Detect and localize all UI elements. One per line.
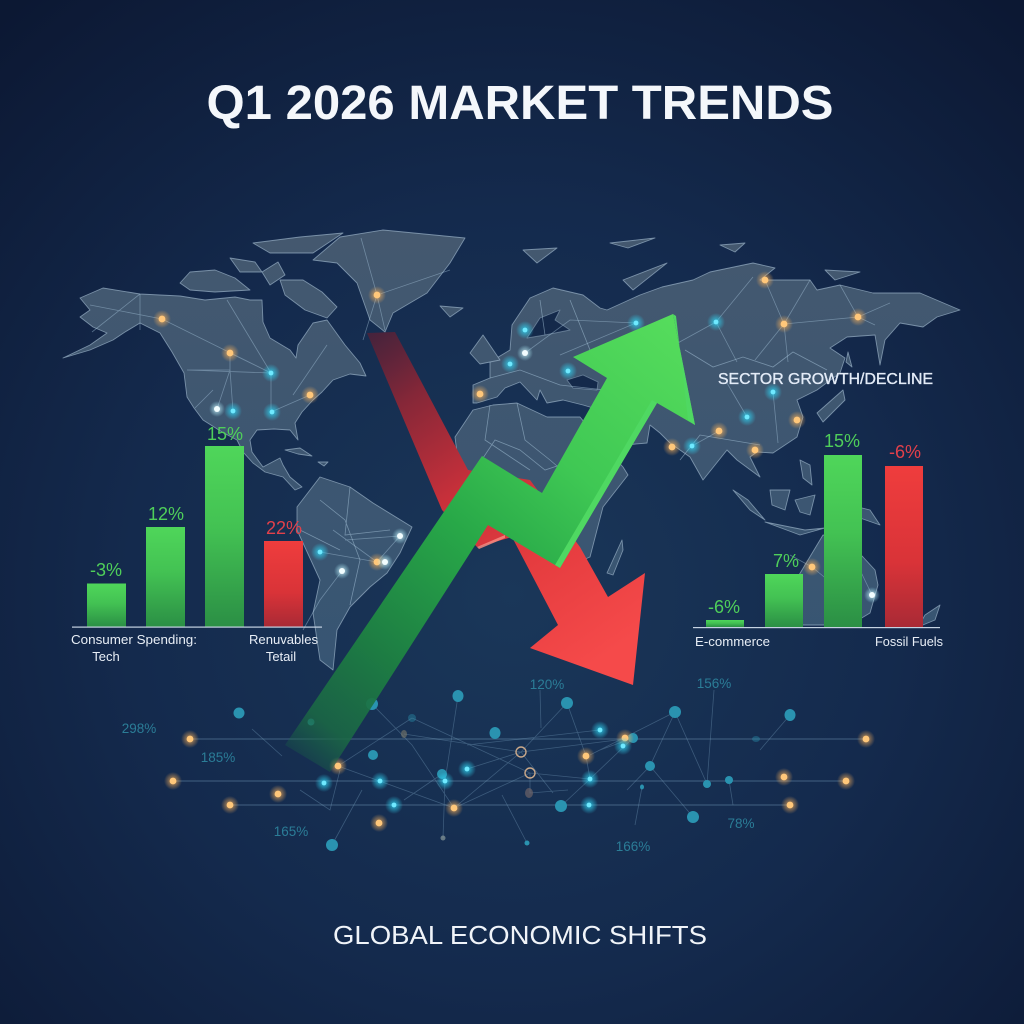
map: polar islands <box>523 238 860 290</box>
network percentages: 120% <box>530 677 564 692</box>
map network nodes <box>153 271 880 603</box>
map: Greenland <box>313 230 465 332</box>
right bar labels <box>695 634 943 649</box>
green arrow bevel <box>555 314 695 568</box>
network nodes: orange <box>164 729 875 832</box>
left axis <box>72 626 322 628</box>
left bars <box>87 446 303 627</box>
left bar chart <box>71 424 322 664</box>
right bars <box>706 455 923 627</box>
network percentages: 156% <box>697 676 731 691</box>
world map <box>63 230 960 670</box>
footer caption: GLOBAL ECONOMIC SHIFTS <box>333 920 707 950</box>
map: Baltic Sea <box>527 310 570 338</box>
map: Black Sea <box>567 375 598 390</box>
map: British Isles <box>470 335 500 364</box>
network percentages: 78% <box>727 816 755 831</box>
left bar values: -3% <box>90 560 122 580</box>
map: North America <box>63 288 366 490</box>
left bar values <box>90 424 302 580</box>
right bar values <box>708 431 921 617</box>
map: arctic islands <box>180 233 343 292</box>
title: Q1 2026 MARKET TRENDS <box>206 77 834 130</box>
map: Caribbean islands <box>285 448 328 466</box>
right bar values: -6% <box>708 597 740 617</box>
network percentages <box>122 676 755 854</box>
right axis <box>693 627 940 628</box>
right bar values: -6% <box>889 442 921 462</box>
left bar values: 22% <box>266 518 302 538</box>
network percentages: 298% <box>122 721 156 736</box>
red down arrow <box>367 332 645 685</box>
network percentages: 166% <box>616 839 650 854</box>
right chart heading: SECTOR GROWTH/DECLINE <box>718 371 933 388</box>
red arrow highlight edge <box>477 535 505 549</box>
left bar values: 15% <box>207 424 243 444</box>
map: New Zealand <box>918 605 940 627</box>
left bar labels: Tech <box>92 649 120 664</box>
map: Baffin Island <box>280 280 337 318</box>
right bar values: 15% <box>824 431 860 451</box>
network ring nodes <box>516 747 535 778</box>
network nodes: teal <box>234 690 796 851</box>
map network lines <box>90 238 890 630</box>
map: Australia <box>790 535 878 625</box>
right bar labels: E-commerce <box>695 634 770 649</box>
map borders <box>300 300 827 605</box>
map: Iceland <box>440 306 463 317</box>
network percentages: 165% <box>274 824 308 839</box>
green up arrow <box>285 314 695 772</box>
map: Africa <box>455 403 628 570</box>
right bar labels: Fossil Fuels <box>875 634 943 649</box>
map: Madagascar <box>607 540 623 575</box>
left bar labels <box>71 632 319 664</box>
network percentages: 185% <box>201 750 235 765</box>
left bar labels: Tetail <box>266 649 296 664</box>
left bar labels: Renuvables <box>249 632 319 647</box>
bottom data network <box>122 676 875 854</box>
left bar labels: Consumer Spending: <box>71 632 197 647</box>
map: Southeast Asia islands <box>733 460 880 535</box>
network lines <box>173 690 866 845</box>
map: Europe and Asia <box>473 263 960 480</box>
map: South America <box>297 477 412 670</box>
left bar values: 12% <box>148 504 184 524</box>
network nodes: cyan <box>315 721 632 814</box>
map: Japan and Sakhalin <box>817 352 852 422</box>
right bar chart <box>693 431 943 649</box>
right bar values: 7% <box>773 551 799 571</box>
